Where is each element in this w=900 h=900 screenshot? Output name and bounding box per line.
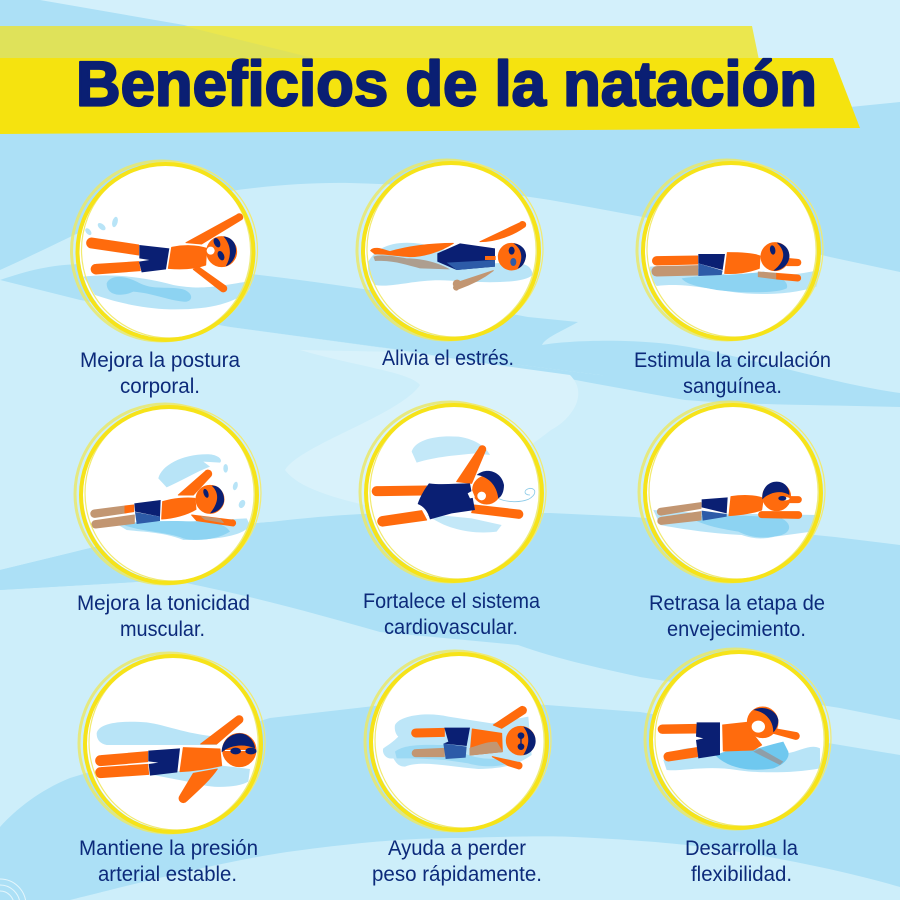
medal ring 6 (639, 402, 825, 582)
label 4: Mejora la tonicidad (77, 592, 250, 615)
medal ring 3 (637, 160, 823, 340)
medal ring 4 (75, 404, 261, 584)
medal ring 5 (360, 402, 546, 582)
label 3: Estimula la circulación (634, 349, 831, 372)
label 9: flexibilidad. (691, 863, 792, 886)
swimmer illustration 5 (372, 436, 535, 533)
panel: Desarrolla la flexibilidad (645, 649, 831, 886)
label 3: sanguínea. (683, 375, 782, 398)
swimmer illustration 7 (96, 716, 257, 803)
panel: Mantiene la presión arterial estable (79, 653, 265, 886)
medal ring 1 (72, 161, 258, 341)
label 7: Mantiene la presión (79, 837, 258, 860)
label 4 (77, 592, 250, 641)
label 9 (685, 837, 798, 886)
label 7: arterial estable. (98, 863, 237, 886)
panel: Retrasa la etapa de envejecimiento (639, 402, 825, 641)
label 6 (649, 592, 825, 641)
swimmer illustration 8 (383, 706, 536, 769)
swimmer illustration 3 (650, 243, 820, 294)
label 4: muscular. (120, 618, 205, 641)
panel: Alivia el estrés (357, 160, 543, 370)
panel: Estimula la circulación sanguínea (634, 160, 831, 398)
medal ring 8 (365, 651, 551, 831)
header banner (0, 26, 860, 134)
label 8: peso rápidamente. (372, 863, 542, 886)
swimmer illustration 1 (83, 214, 250, 309)
swimmer illustration 6 (653, 482, 818, 538)
label 8: Ayuda a perder (388, 837, 526, 860)
label 1: Mejora la postura (80, 349, 240, 372)
label 8 (372, 837, 542, 886)
label 5 (363, 590, 540, 639)
swimmer illustration 2 (368, 221, 533, 290)
panel: Mejora la postura corporal (72, 161, 258, 398)
label 9: Desarrolla la (685, 837, 798, 860)
label 1 (80, 349, 240, 398)
panel: Ayuda a perder peso rápidamente (365, 651, 551, 886)
title: Beneficios de la natación (76, 50, 817, 120)
label 3 (634, 349, 831, 398)
label 5: Fortalece el sistema (363, 590, 540, 613)
medal ring 7 (79, 653, 265, 833)
swimmer illustration 9 (658, 707, 820, 772)
medal ring 2 (357, 160, 543, 340)
label 5: cardiovascular. (384, 616, 518, 639)
label 7 (79, 837, 258, 886)
label 6: Retrasa la etapa de (649, 592, 825, 615)
label 6: envejecimiento. (667, 618, 806, 641)
panel: Mejora la tonicidad muscular (75, 404, 261, 641)
panel: Fortalece el sistema cardiovascular (360, 402, 546, 639)
label 1: corporal. (120, 375, 200, 398)
label 2: Alivia el estrés. (382, 347, 514, 370)
medal ring 9 (645, 649, 831, 829)
swimmer illustration 4 (91, 454, 250, 540)
